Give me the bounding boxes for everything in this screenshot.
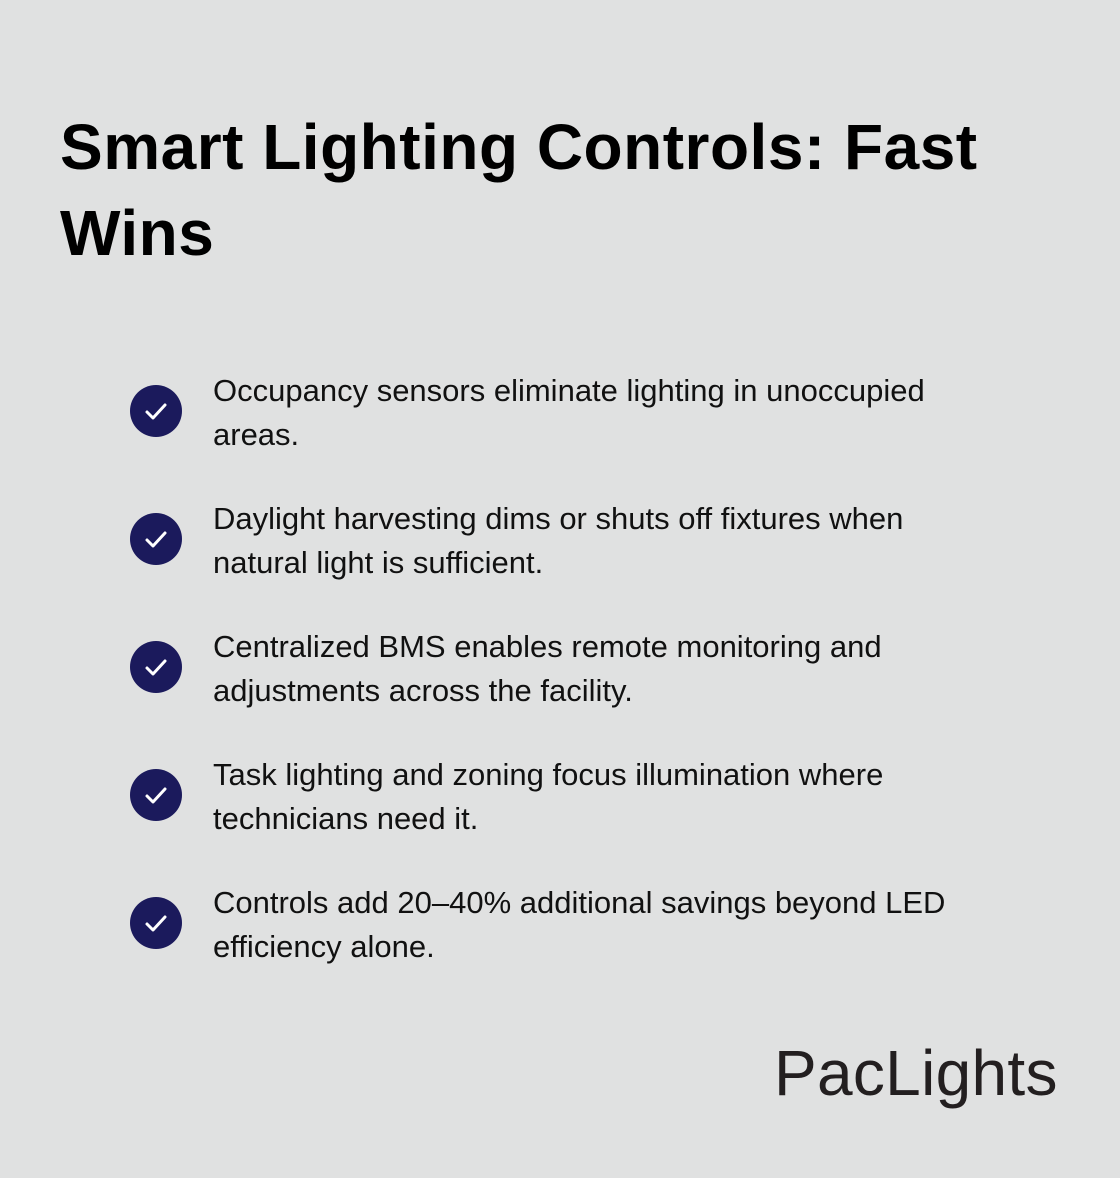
- icon: check: [130, 769, 182, 821]
- title: Smart Lighting Controls: Fast: [60, 111, 978, 183]
- item 3: [130, 629, 882, 708]
- icon: check: [130, 641, 182, 693]
- item 1: [130, 373, 925, 452]
- item 2: [130, 501, 903, 580]
- text: Controls add 20–40% additional savings beyond LED efficiency alone.: [213, 885, 945, 964]
- icon: check: [130, 897, 182, 949]
- item 4: [130, 757, 883, 836]
- text: Occupancy sensors eliminate lighting in unoccupied areas.: [213, 373, 925, 452]
- icon: check: [130, 385, 182, 437]
- title: [60, 111, 978, 269]
- text: Task lighting and zoning focus illumination where technicians need it.: [213, 757, 883, 836]
- logo: PacLights: [774, 1037, 1058, 1109]
- icon: check: [130, 513, 182, 565]
- item 5: [130, 885, 945, 964]
- text: Centralized BMS enables remote monitoring and adjustments across the facility.: [213, 629, 882, 708]
- title: Wins: [60, 197, 214, 269]
- text: Daylight harvesting dims or shuts off fixtures when natural light is sufficient.: [213, 501, 903, 580]
